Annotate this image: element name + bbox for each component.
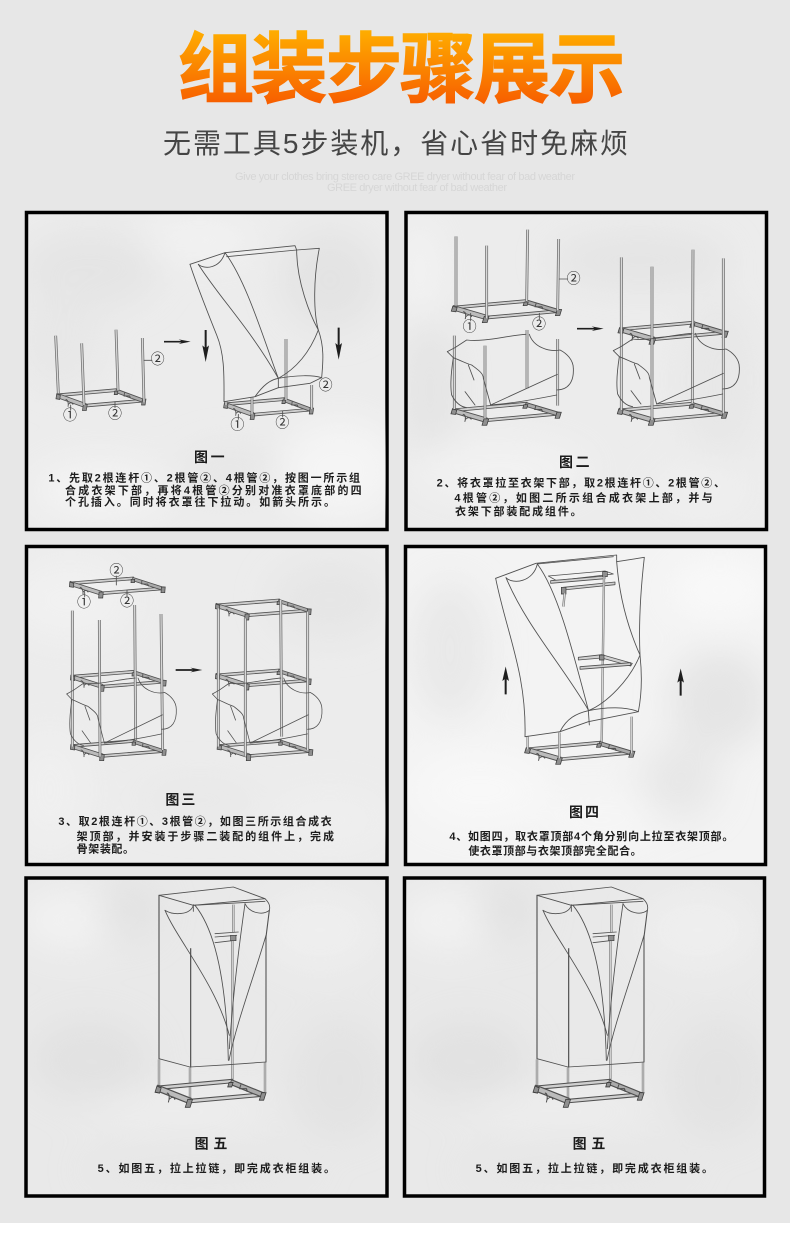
lower rack with posts and cover <box>67 605 176 761</box>
instruction text 3: 3、取2根连杆①、3根管②，如图三所示组合成衣 <box>58 814 332 828</box>
part labels: ② <box>567 270 581 286</box>
heading: figure 4: 图四 <box>569 804 599 820</box>
assembled skeleton <box>212 599 322 761</box>
arrow: right <box>577 326 604 331</box>
arrow: up right <box>677 668 684 696</box>
instruction text 3: 架顶部，并安装于步骤二装配的组件上，完成 <box>77 829 334 843</box>
part labels right: ② <box>319 377 333 393</box>
heading: figure 5: 图五 <box>195 1135 227 1151</box>
top frame parts: ② <box>120 593 134 609</box>
instruction text 1: 个孔插入。同时将衣罩往下拉动。如箭头所示。 <box>65 495 335 509</box>
part labels <box>63 351 165 423</box>
cover being pulled up <box>496 555 644 737</box>
top frame parts: ② <box>109 562 123 578</box>
instruction text 4 <box>449 829 733 858</box>
wardrobe assembled <box>528 887 648 1107</box>
instruction text 4: 使衣罩顶部与衣架顶部完全配合。 <box>468 844 642 858</box>
instruction text 5: 5、如图五，拉上拉链，即完成衣柜组装。 <box>476 1161 713 1175</box>
instruction text 5: 5、如图五，拉上拉链，即完成衣柜组装。 <box>98 1161 335 1175</box>
subtitle: 无需工具5步装机，省心省时免麻烦 <box>163 128 628 159</box>
top frame parts <box>69 562 166 610</box>
rack frame inside <box>521 571 638 765</box>
panel: step 3 <box>10 546 390 864</box>
faint English tagline: GREE dryer without fear of bad weather <box>327 182 507 194</box>
rack: left frame <box>54 330 148 411</box>
heading: figure 2: 图二 <box>559 454 590 470</box>
instruction text 2 <box>437 475 725 518</box>
faint English tagline: Give your clothes bring stereo care GREE dryer without fear of bad weather <box>235 171 575 183</box>
wardrobe assembled <box>150 887 270 1107</box>
panel: step 5 duplicate <box>398 878 768 1196</box>
rack: upper part <box>448 230 565 323</box>
part labels right: ① <box>230 416 244 432</box>
assembled rack <box>613 250 739 426</box>
part labels <box>463 270 581 335</box>
instruction text 1 <box>48 471 362 509</box>
instruction text 1: 合成衣架下部，再将4根管②分别对准衣罩底部的四 <box>65 483 362 497</box>
top frame parts: ① <box>77 594 91 610</box>
instruction text 2: 4根管②，如图二所示组合成衣架上部，并与 <box>454 491 713 505</box>
instruction text 4: 4、如图四，取衣罩顶部4个角分别向上拉至衣架顶部。 <box>449 829 733 843</box>
part labels right <box>230 377 333 432</box>
heading: figure 5: 图五 <box>573 1135 605 1151</box>
panel: step 2 <box>404 212 766 530</box>
part labels: ② <box>108 405 122 421</box>
arrow: up left <box>502 666 509 694</box>
faint English tagline <box>235 171 575 194</box>
instruction text 2: 衣架下部装配成组件。 <box>455 504 582 518</box>
arrow: right <box>164 339 191 344</box>
heading: figure 3: 图三 <box>165 792 195 808</box>
rack: lower part with cover <box>447 330 573 426</box>
panel: step 4 <box>406 546 770 864</box>
panel: step 5 <box>20 878 390 1196</box>
title: 组装步骤展示 <box>178 28 625 113</box>
part labels: ② <box>532 316 546 332</box>
arrow: down <box>202 330 209 362</box>
part labels: ① <box>63 407 77 423</box>
arrow: right <box>176 668 202 672</box>
rack with cover <box>190 246 323 420</box>
part labels right: ② <box>275 414 289 430</box>
arrow: down right <box>335 328 342 360</box>
instruction text 3: 骨架装配。 <box>77 841 134 855</box>
instruction text 1: 1、先取2根连杆①、2根管②、4根管②，按图一所示组 <box>48 471 360 485</box>
part labels: ② <box>151 351 165 367</box>
part labels: ① <box>463 319 477 335</box>
panel: step 1 <box>20 212 400 530</box>
heading: figure 1: 图一 <box>194 449 225 465</box>
instruction text 2: 2、将衣罩拉至衣架下部，取2根连杆①、2根管②、 <box>437 475 725 489</box>
instruction text 3 <box>58 814 334 855</box>
